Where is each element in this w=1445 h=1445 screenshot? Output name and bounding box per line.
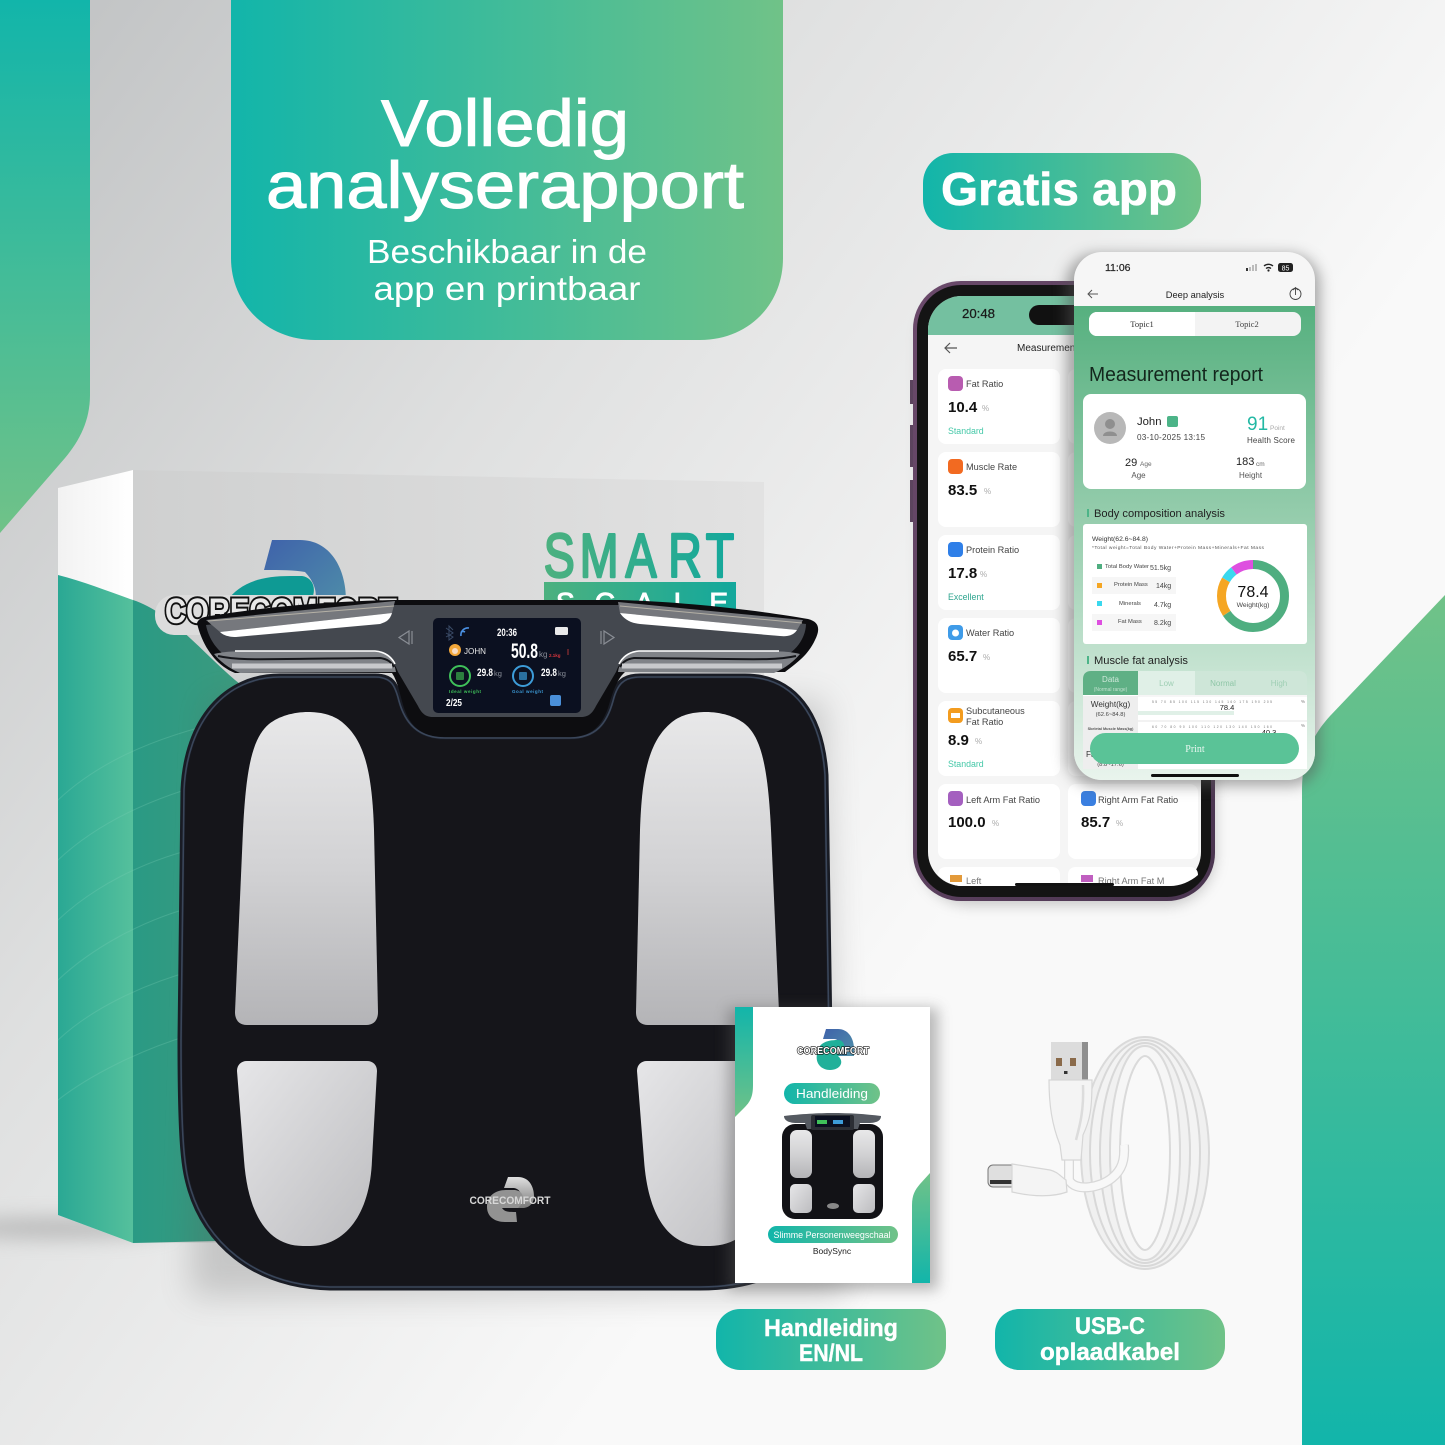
metric: right arm fat ratio: 85.7	[1081, 814, 1110, 831]
body composition card	[1083, 524, 1307, 644]
metric: protein ratio: %	[980, 570, 987, 579]
scale display: 29.8	[477, 667, 493, 679]
foot pad: lower left	[237, 1061, 377, 1246]
badge: manual: Handleiding	[764, 1315, 898, 1342]
product name badge: Slimme Personenweegschaal	[774, 1230, 890, 1241]
muscle fat table: %	[1301, 723, 1305, 728]
metric: subcutaneous fat ratio: 8.9	[948, 732, 969, 749]
metric: muscle rate: Muscle Rate	[966, 462, 1017, 472]
body composition card: Weight(62.6~84.8)	[1092, 536, 1148, 543]
usb-c cable	[988, 1042, 1204, 1264]
muscle fat table: (62.6~84.8)	[1096, 712, 1125, 718]
manual badge: Handleiding	[796, 1086, 868, 1101]
print button: Print	[1185, 744, 1205, 755]
metric: subcutaneous fat ratio: Subcutaneous	[966, 706, 1025, 716]
metric: protein ratio: Protein Ratio	[966, 545, 1019, 555]
title: analyserapport	[266, 148, 744, 222]
scale display: kg	[539, 650, 547, 659]
front phone: Measurement report	[1089, 364, 1263, 386]
manual badge	[784, 1083, 880, 1104]
profile card: Age	[1140, 461, 1152, 468]
manual logo	[797, 1029, 869, 1070]
back phone	[910, 281, 1215, 905]
badge: cable: oplaadkabel	[1040, 1339, 1180, 1366]
bluetooth icon	[446, 626, 453, 640]
title	[266, 86, 744, 222]
cable coil	[1086, 1042, 1204, 1264]
metric: subcutaneous fat ratio	[948, 706, 1025, 769]
muscle fat table: Data	[1102, 675, 1119, 684]
body composition card: *Total weight=Total Body Water+Protein Mass+Minerals+Fat Mass	[1092, 545, 1265, 551]
metric: fat ratio: Standard	[948, 426, 984, 436]
scale head bar	[197, 600, 818, 737]
status icons: 85	[1282, 266, 1289, 272]
battery icon	[555, 627, 568, 635]
scale display: Goal weight	[512, 689, 544, 694]
goal weight ring	[513, 666, 533, 686]
menu icon	[550, 695, 561, 706]
profile card: Age	[1131, 471, 1146, 480]
muscle fat table: 78.4	[1220, 703, 1234, 712]
heading: muscle fat: Muscle fat analysis	[1094, 655, 1188, 667]
box wordmark: SMART	[544, 520, 734, 591]
badge: cable	[995, 1309, 1225, 1370]
metric: fat ratio: Fat Ratio	[966, 379, 1003, 389]
metric: muscle rate	[948, 459, 1017, 499]
muscle fat table: Fat	[1086, 750, 1099, 759]
muscle fat table: (Normal range)	[1094, 687, 1128, 693]
ideal weight ring	[450, 666, 470, 686]
product box	[0, 470, 764, 1243]
muscle fat table: High	[1271, 679, 1287, 688]
foot pad: upper left	[235, 712, 378, 1025]
scale display: 50.8	[511, 640, 538, 663]
title: Volledig	[381, 86, 629, 160]
manual	[728, 1007, 938, 1290]
legend	[1097, 564, 1171, 627]
legend: 4.7kg	[1154, 602, 1171, 609]
metric: water ratio: Water Ratio	[966, 628, 1014, 638]
metric: subcutaneous fat ratio: %	[975, 737, 982, 746]
scale display: kg	[558, 669, 566, 678]
metric: left arm fat ratio	[948, 791, 1040, 831]
smart scale	[180, 600, 845, 1296]
legend: 8.2kg	[1154, 620, 1171, 627]
usb-c plug	[988, 1164, 1067, 1196]
badge: manual: EN/NL	[799, 1340, 863, 1367]
legend: 51.5kg	[1150, 565, 1171, 572]
scale logo	[470, 1177, 551, 1222]
foot pad: upper right	[636, 712, 779, 1025]
product name badge	[768, 1226, 898, 1243]
metric: fat ratio: %	[982, 404, 989, 413]
muscle fat table: 60 70 80 90 100 110 120 130 140 150 160	[1152, 725, 1272, 729]
muscle fat table: Low	[1159, 679, 1174, 688]
badge: gratis app	[923, 153, 1201, 230]
front phone	[1066, 252, 1320, 786]
scale logo: CORECOMFORT	[470, 1195, 551, 1207]
legend: 14kg	[1156, 583, 1171, 590]
muscle fat table: 55 70 85 100 115 130 145 160 175 190 205	[1152, 700, 1272, 704]
title panel	[231, 0, 783, 340]
partial row: Left	[966, 876, 982, 886]
scale display	[433, 618, 581, 713]
front phone: 11:06	[1105, 262, 1131, 274]
partial row: Right Arm Fat M	[1098, 876, 1164, 886]
metric: right arm fat ratio	[1081, 791, 1178, 831]
front phone: Deep analysis	[1166, 290, 1225, 300]
scale display: 29.8	[541, 667, 557, 679]
back phone: Measurement	[1017, 343, 1078, 354]
scale display: 20:36	[497, 627, 517, 639]
metric: subcutaneous fat ratio: Fat Ratio	[966, 717, 1003, 727]
scale display: JOHN	[464, 647, 486, 656]
muscle fat table: Normal	[1210, 679, 1236, 688]
scale display: 2/25	[446, 697, 462, 709]
manual scale illustration	[782, 1113, 883, 1219]
cable lead	[1069, 1145, 1124, 1187]
body composition card: Weight(kg)	[1237, 602, 1269, 609]
legend: Protein Mass	[1114, 582, 1148, 588]
box logo	[155, 540, 400, 635]
box wordmark: SCALE	[556, 587, 728, 618]
subtitle	[367, 233, 647, 307]
metric: protein ratio: Excellent	[948, 592, 984, 602]
profile card: 03-10-2025 13:15	[1137, 433, 1205, 442]
metric: protein ratio	[948, 542, 1019, 602]
muscle fat table: 40.3	[1262, 728, 1276, 737]
print button	[1090, 733, 1299, 764]
donut chart	[1222, 564, 1284, 628]
profile card: cm	[1256, 461, 1265, 468]
metric: water ratio: 65.7	[948, 648, 977, 665]
scale body	[180, 676, 832, 1288]
subtitle: Beschikbaar in de	[367, 233, 647, 270]
metric: left arm fat ratio: Left Arm Fat Ratio	[966, 795, 1040, 805]
usb-a plug	[1049, 1042, 1092, 1160]
metric: water ratio	[948, 625, 1014, 665]
manual logo: CORECOMFORT	[797, 1046, 869, 1057]
share icon	[1290, 288, 1301, 300]
legend: Fat Mass	[1118, 619, 1142, 625]
metric: muscle rate: 83.5	[948, 482, 977, 499]
heading: body composition: Body composition analysis	[1094, 508, 1226, 520]
topic tabs: Topic1	[1130, 319, 1154, 329]
metric: right arm fat ratio: Right Arm Fat Ratio	[1098, 795, 1178, 805]
legend: Total Body Water	[1105, 564, 1149, 570]
muscle fat table: Skeletal Muscle Mass(kg)	[1088, 727, 1134, 731]
wifi icon	[461, 628, 469, 636]
profile card: 91	[1247, 414, 1268, 435]
muscle fat table: %	[1301, 699, 1305, 704]
profile card	[1083, 394, 1306, 489]
profile card: 183	[1236, 456, 1254, 468]
foot pad: lower right	[637, 1061, 777, 1246]
metric: protein ratio: 17.8	[948, 565, 977, 582]
metric: fat ratio: 10.4	[948, 399, 978, 416]
metric cards	[938, 369, 1198, 886]
profile card: Height	[1239, 471, 1263, 480]
metric: left arm fat ratio: 100.0	[948, 814, 986, 831]
partial row	[950, 875, 1164, 886]
profile card: 29	[1125, 457, 1137, 469]
left corner shape	[0, 0, 90, 533]
profile card: John	[1137, 416, 1162, 428]
avatar icon	[449, 644, 461, 656]
manual corner left	[735, 1007, 753, 1117]
scale display: 2.1kg	[549, 653, 561, 658]
legend: Minerals	[1119, 601, 1141, 607]
metric: right arm fat ratio: %	[1116, 819, 1123, 828]
badge: cable: USB-C	[1075, 1313, 1145, 1340]
badge: gratis app: Gratis app	[941, 163, 1177, 215]
status icons	[1246, 263, 1293, 272]
metric: subcutaneous fat ratio: Standard	[948, 759, 984, 769]
arrow icons	[399, 631, 614, 644]
muscle fat table	[1083, 671, 1307, 769]
metric: muscle rate: %	[984, 487, 991, 496]
muscle fat table: Weight(kg)	[1091, 700, 1130, 709]
badge: manual	[716, 1309, 946, 1370]
scale display: Ideal weight	[449, 689, 482, 694]
body composition card: 78.4	[1237, 584, 1269, 601]
right column shape	[1302, 595, 1445, 1445]
metric: water ratio: %	[983, 653, 990, 662]
topic tabs: Topic2	[1235, 319, 1259, 329]
manual corner right	[912, 1173, 930, 1283]
back phone: 20:48	[962, 307, 995, 321]
subtitle: app en printbaar	[374, 270, 640, 307]
profile card: Health Score	[1247, 436, 1296, 445]
topic tabs	[1089, 312, 1301, 336]
scale display: kg	[494, 669, 502, 678]
metric: left arm fat ratio: %	[992, 819, 999, 828]
profile card: Point	[1270, 425, 1285, 432]
manual: BodySync	[813, 1246, 852, 1256]
metric: fat ratio	[948, 376, 1003, 436]
muscle fat table: (8.8~17.6)	[1097, 762, 1124, 768]
box logo: CORECOMFORT	[165, 592, 397, 631]
